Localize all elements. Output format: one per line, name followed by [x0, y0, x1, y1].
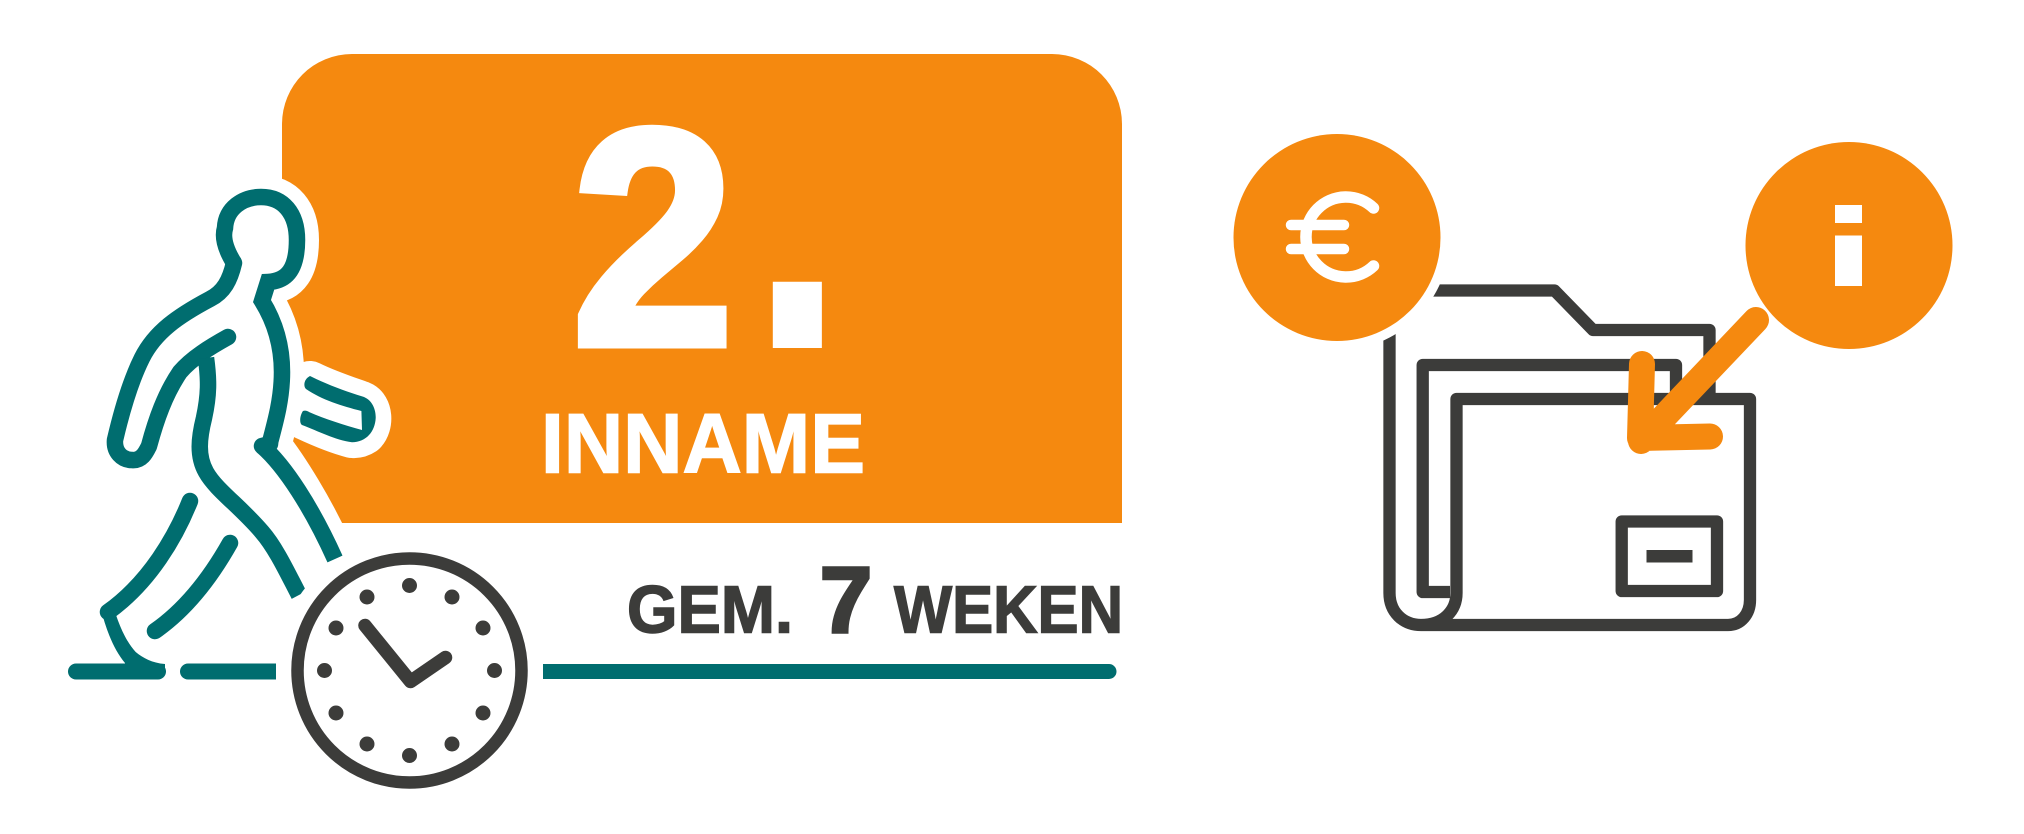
folder body: [1390, 330, 1750, 625]
person halo: [75, 197, 369, 672]
heading: step name: INNAME: [541, 396, 865, 490]
heading: step number: [572, 0, 844, 438]
panel: orange step header: [282, 0, 1122, 523]
back arm: [115, 263, 234, 460]
person outline: [101, 197, 376, 672]
folder back tab: [1430, 290, 1710, 399]
torso back line: [200, 358, 299, 595]
text: average duration: [627, 548, 1123, 652]
back leg inner: [155, 543, 230, 631]
back foot wedge: [101, 608, 165, 672]
clock hands: [365, 626, 446, 682]
text: average duration: GEM.: [627, 572, 793, 648]
icon: info circle: [1736, 132, 1962, 358]
icon: folder: [1390, 290, 1750, 625]
timeline line right: [543, 664, 1116, 679]
icon: walking person: [75, 197, 376, 684]
icon: euro circle: [1224, 124, 1450, 350]
icon: clock: [276, 538, 542, 804]
back leg outer: [108, 501, 190, 612]
front leg: [262, 446, 335, 559]
ground line: [76, 664, 276, 680]
address label: [1622, 522, 1717, 591]
letter i: [1835, 205, 1862, 286]
euro sign: [1291, 197, 1374, 277]
text: average duration: WEKEN: [894, 572, 1123, 648]
head and chest: [224, 197, 297, 446]
clock ticks: [317, 578, 502, 763]
text: average duration: 7: [820, 548, 872, 652]
label dash: [1646, 550, 1692, 562]
inner sheet: [1423, 365, 1676, 592]
front arm: [300, 376, 376, 442]
heading: step number: 2: [572, 66, 734, 410]
ground line cut at clock: [276, 660, 288, 684]
arrow: into folder: [1640, 320, 1756, 441]
